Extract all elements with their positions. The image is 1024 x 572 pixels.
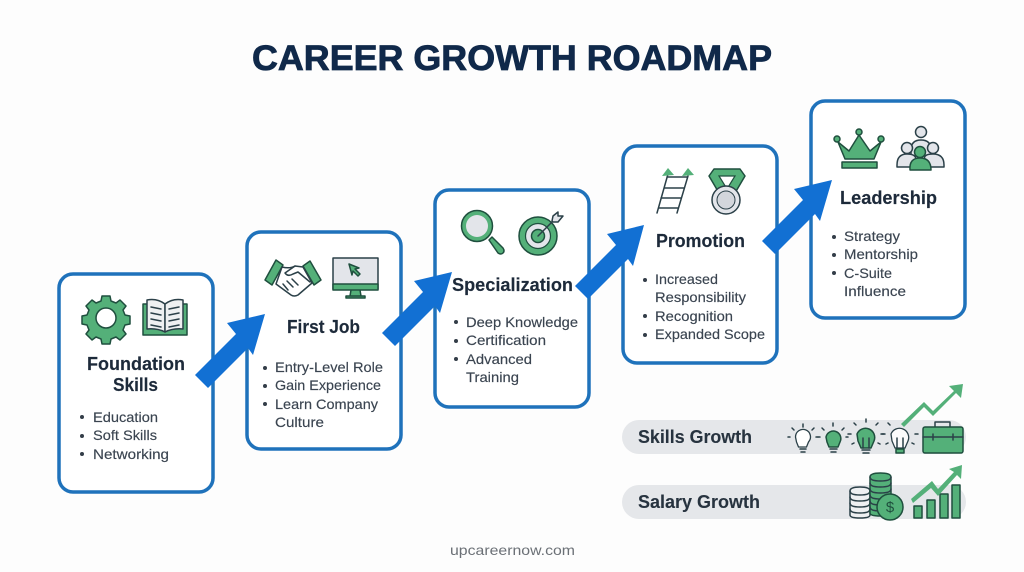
- icon: monitor: [333, 258, 378, 298]
- icon: target: [519, 212, 563, 255]
- heading: First Job: [287, 317, 360, 337]
- footer url: upcareernow.com: [450, 542, 575, 558]
- bullet list: Influence: [844, 283, 906, 299]
- bullet list: [80, 409, 169, 462]
- bullet list: [832, 228, 918, 299]
- icon: magnifier: [462, 210, 504, 254]
- icon: medal: [709, 169, 745, 214]
- title: CAREER GROWTH ROADMAP: [252, 39, 772, 78]
- bullet list: Mentorship: [844, 246, 918, 262]
- icon: coin stacks: [850, 473, 903, 520]
- heading: Promotion: [656, 231, 745, 251]
- bullet list: [263, 359, 383, 430]
- icon: crown: [834, 129, 884, 168]
- icon: coin stacks: $: [886, 499, 895, 516]
- salary growth bar: [622, 465, 966, 520]
- icon: light bulb half: [818, 423, 848, 452]
- icon: light bulb full: [848, 419, 884, 453]
- bullet list: Soft Skills: [93, 427, 157, 443]
- icon: toolbox: [923, 422, 963, 453]
- bullet list: Training: [466, 369, 519, 385]
- icon: light bulb outline: [788, 424, 818, 452]
- bullet list: Deep Knowledge: [466, 314, 578, 330]
- panel: first job: [247, 232, 401, 449]
- panel: promotion: [623, 146, 777, 363]
- label: Skills Growth: [638, 427, 752, 447]
- icon: light bulb filament: [882, 423, 918, 453]
- icon: ladder: [657, 168, 694, 213]
- heading: Foundation: [87, 354, 185, 374]
- heading: Leadership: [840, 188, 937, 208]
- icon: open book: [143, 300, 187, 335]
- bullet list: Expanded Scope: [655, 326, 765, 342]
- icon: growth arrow: [901, 384, 963, 427]
- arrow: first job to specialization: [382, 272, 452, 346]
- bullet list: Learn Company: [275, 396, 378, 412]
- bullet list: Culture: [275, 414, 324, 430]
- bullet list: [454, 314, 578, 385]
- panel: leadership: [811, 101, 965, 318]
- heading: [87, 354, 185, 395]
- bullet list: Responsibility: [655, 289, 746, 305]
- arrow: foundation to first job: [195, 314, 265, 388]
- icon: bar chart with arrow: [911, 465, 962, 518]
- bullet list: Increased: [655, 271, 718, 287]
- icon: handshake: [265, 260, 321, 296]
- bullet list: Entry-Level Role: [275, 359, 383, 375]
- panel: foundation skills: [59, 274, 213, 492]
- panel: specialization: [435, 190, 589, 407]
- arrow: specialization to promotion: [575, 225, 644, 299]
- bullet list: Strategy: [844, 228, 900, 244]
- heading: Specialization: [452, 275, 573, 295]
- bullet list: Networking: [93, 446, 169, 462]
- icon: gear: [82, 296, 130, 344]
- bullet list: C-Suite: [844, 265, 892, 281]
- bullet list: [643, 271, 765, 342]
- bullet list: Recognition: [655, 308, 733, 324]
- label: Salary Growth: [638, 492, 760, 512]
- bullet list: Certification: [466, 332, 546, 348]
- skills growth bar: [622, 384, 966, 454]
- icon: people: [897, 126, 944, 170]
- arrow: promotion to leadership: [762, 180, 832, 254]
- heading: Skills: [113, 375, 158, 395]
- bullet list: Gain Experience: [275, 377, 381, 393]
- bullet list: Education: [93, 409, 158, 425]
- bullet list: Advanced: [466, 351, 532, 367]
